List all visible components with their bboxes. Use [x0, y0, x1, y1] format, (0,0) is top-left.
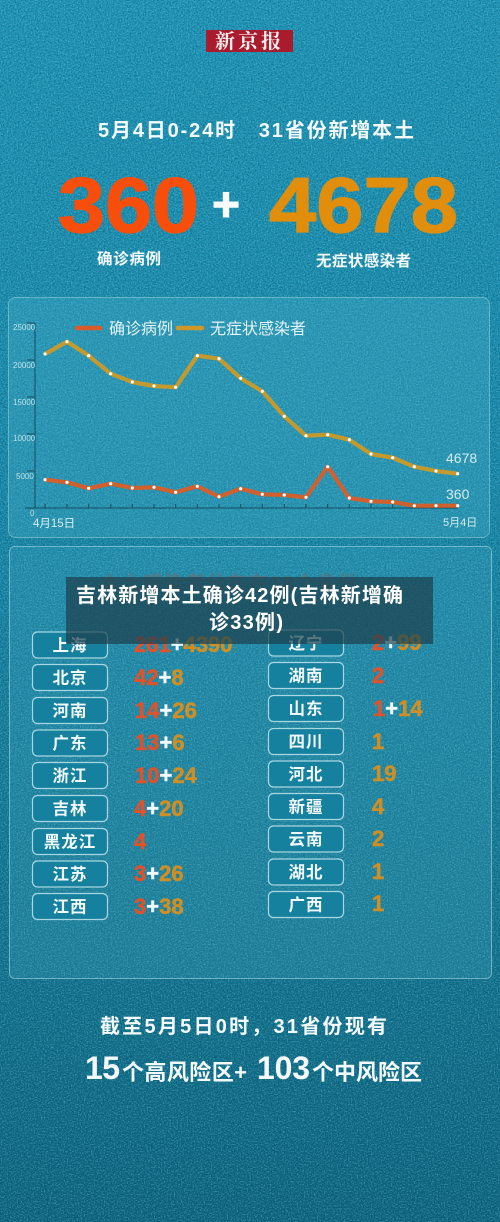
row: 吉林: 吉林 — [52, 800, 88, 818]
row: 北京: 42+8 — [134, 665, 184, 690]
row: 吉林 — [32, 796, 184, 822]
footer line 1: 截至5月5日0时，31省份现有 — [100, 1015, 387, 1038]
row: 广西: 1 — [372, 891, 384, 916]
row: 上海 — [32, 632, 233, 658]
row: 黑龙江: 黑龙江 — [44, 832, 96, 852]
row: 湖南: 2 — [372, 663, 384, 688]
x axis start label: 4月15日 — [33, 518, 75, 530]
row: 河南: 河南 — [52, 702, 88, 720]
row: 四川 — [268, 728, 384, 754]
footer line 2: 个中风险区 — [312, 1060, 422, 1085]
row: 北京 — [32, 664, 184, 690]
row: 浙江: 浙江 — [52, 766, 88, 786]
headline overlay — [66, 577, 433, 644]
row: 河南: 14+26 — [135, 698, 197, 723]
chart axes — [25, 323, 458, 508]
label: asymptomatic: 无症状感染者 — [316, 251, 411, 270]
panel: trend chart — [8, 298, 490, 538]
legend: 无症状感染者 — [210, 320, 306, 338]
row: 山东: 山东 — [288, 698, 324, 718]
row: 河南 — [32, 698, 197, 724]
footer line 2 — [85, 1050, 422, 1086]
row: 江苏: 江苏 — [52, 865, 88, 884]
label: confirmed: 确诊病例 — [97, 249, 161, 268]
row: 河北 — [268, 761, 396, 787]
footer line 2: 个高风险区+ — [122, 1060, 247, 1085]
logo: 新京报: 新京报 — [215, 30, 284, 53]
y axis labels: 15000 — [13, 398, 36, 407]
row: 四川: 1 — [372, 729, 384, 754]
asymptomatic line — [43, 340, 459, 475]
y axis labels — [13, 323, 36, 518]
confirmed cases number: 360 — [58, 161, 199, 249]
panel heading: 本土感染者分布在18个省份 — [100, 572, 357, 595]
end value 360: 360 — [446, 486, 470, 502]
row: 山东: 1+14 — [373, 696, 423, 721]
row: 四川: 四川 — [288, 734, 324, 752]
y axis labels: 10000 — [13, 434, 36, 443]
row: 辽宁: 辽宁 — [288, 633, 324, 653]
row: 浙江: 10+24 — [135, 763, 198, 788]
right column — [268, 630, 423, 918]
row: 湖南: 湖南 — [288, 666, 324, 686]
row: 广东: 13+6 — [135, 730, 185, 755]
legend: 确诊病例 — [109, 320, 173, 338]
row: 广西 — [268, 891, 384, 918]
legend — [77, 320, 306, 338]
row: 新疆: 新疆 — [288, 796, 324, 816]
y axis labels: 20000 — [13, 361, 36, 370]
end value 4678: 4678 — [446, 450, 477, 466]
row: 上海: 261+4390 — [134, 632, 233, 657]
row: 江苏: 3+26 — [134, 861, 184, 886]
confirmed line — [43, 465, 459, 507]
y axis labels: 0 — [30, 509, 35, 518]
row: 云南: 2 — [372, 826, 384, 851]
y axis labels: 5000 — [16, 472, 34, 481]
row: 湖北: 1 — [372, 859, 384, 884]
y axis labels: 25000 — [13, 323, 36, 332]
left column — [32, 632, 233, 920]
row: 辽宁 — [268, 630, 422, 656]
headline overlay: 吉林新增本土确诊42例(吉林新增确 — [76, 584, 403, 607]
row: 江西: 3+38 — [134, 894, 184, 919]
plus sign: + — [212, 179, 240, 232]
x axis end label: 5月4日 — [443, 517, 477, 529]
row: 河北: 河北 — [288, 765, 324, 784]
row: 新疆: 4 — [372, 794, 385, 819]
row: 北京: 北京 — [52, 668, 88, 688]
asymptomatic number: 4678 — [269, 161, 458, 249]
row: 新疆 — [268, 794, 385, 820]
row: 云南: 云南 — [288, 830, 324, 849]
row: 黑龙江 — [32, 828, 147, 854]
row: 广东: 广东 — [52, 733, 88, 753]
panel: province distribution — [10, 546, 492, 978]
row: 湖南 — [268, 662, 384, 688]
row: 江苏 — [32, 861, 184, 887]
row: 山东 — [268, 696, 423, 722]
row: 广东 — [32, 730, 185, 756]
row: 上海: 上海 — [52, 636, 88, 655]
heading: 5月4日0-24时 31省份新增本土 — [98, 119, 414, 142]
headline overlay: 诊33例) — [209, 611, 283, 634]
row: 浙江 — [32, 762, 198, 788]
row: 黑龙江: 4 — [134, 829, 147, 854]
footer line 2: 15 — [85, 1050, 120, 1086]
row: 湖北: 湖北 — [288, 863, 324, 882]
row: 吉林: 4+20 — [134, 796, 184, 821]
row: 云南 — [268, 826, 384, 852]
row: 辽宁: 2+99 — [372, 630, 422, 655]
row: 湖北 — [268, 859, 384, 885]
big numbers — [58, 161, 458, 249]
row: 河北: 19 — [372, 761, 396, 786]
row: 广西: 广西 — [288, 896, 324, 914]
row: 江西: 江西 — [52, 898, 88, 916]
row: 江西 — [32, 894, 184, 920]
footer line 2: 103 — [257, 1050, 310, 1086]
